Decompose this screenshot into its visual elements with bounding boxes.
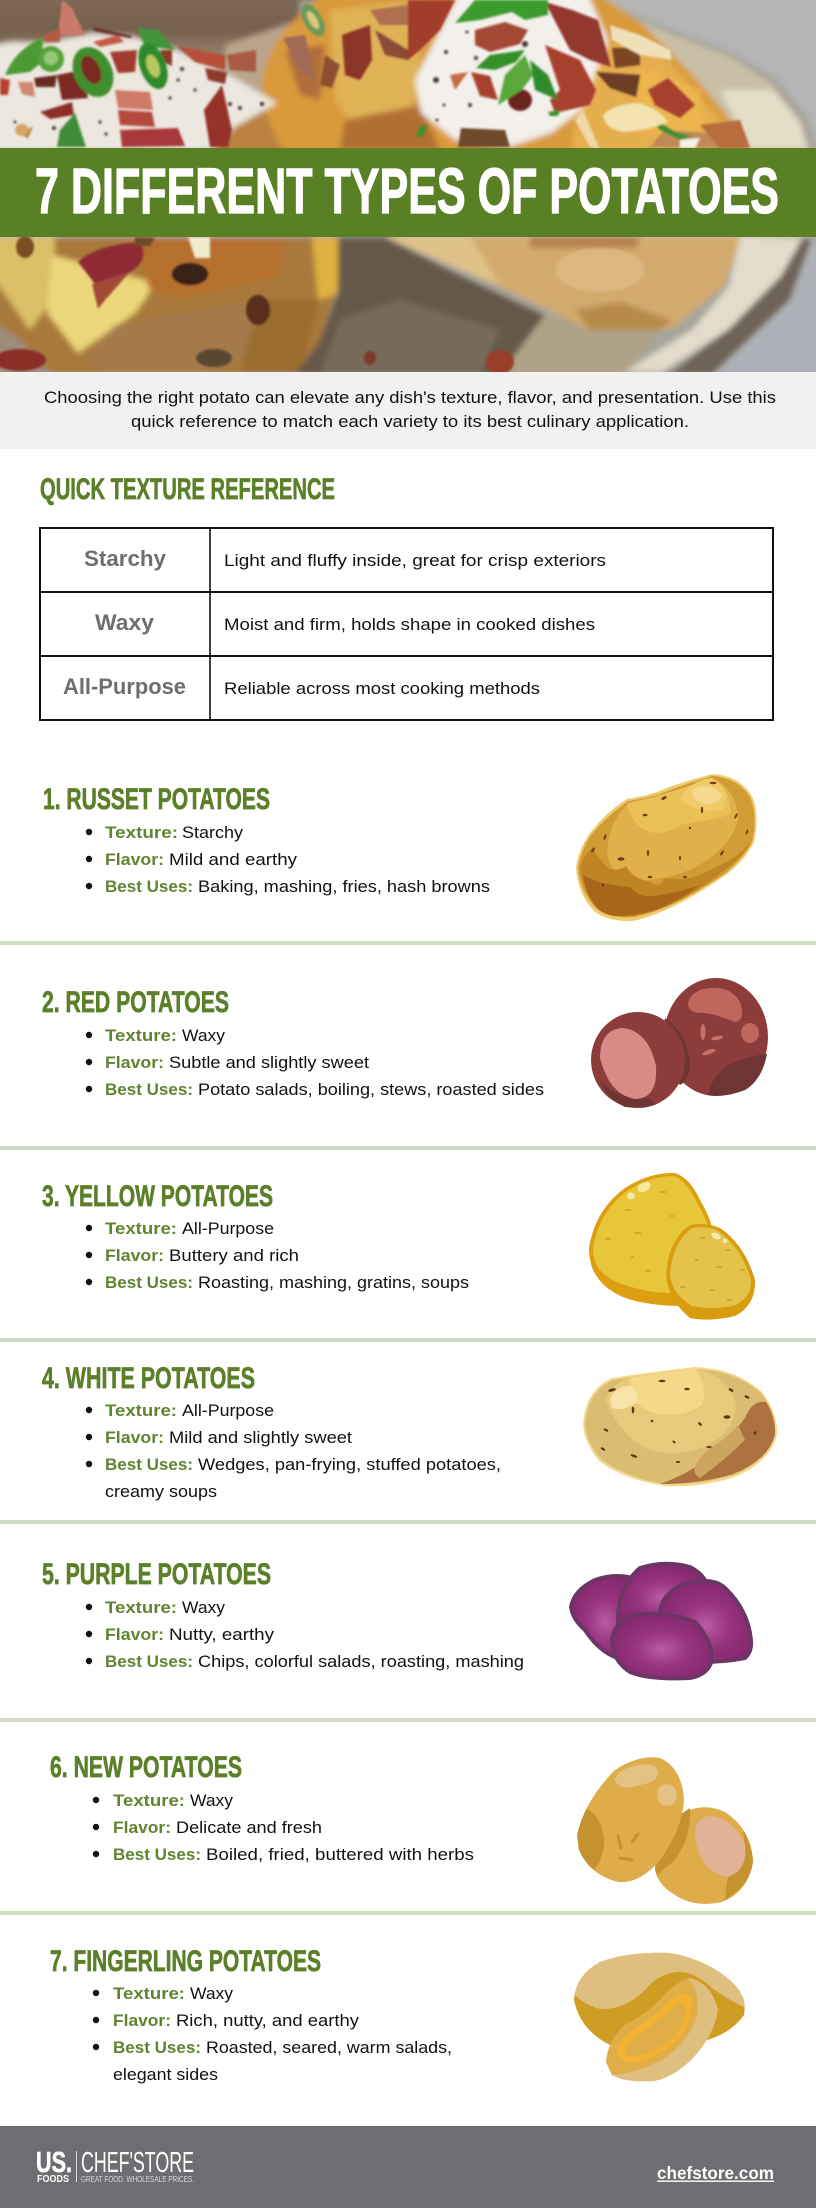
section 4: white potatoes: Flavor: [105, 1428, 164, 1447]
section 1: russet potatoes: 1. RUSSET POTATOES [43, 783, 270, 816]
texture reference table: Starchy [84, 546, 167, 571]
section 6: new potatoes: Boiled, fried, buttered with herbs [206, 1845, 474, 1864]
section 7: fingerling potatoes: Rich, nutty, and earthy [176, 2011, 360, 2030]
section 5: purple potatoes: Best Uses: [105, 1652, 193, 1671]
section 4: white potatoes: Wedges, pan-frying, stuffed potatoes, [198, 1455, 501, 1474]
section 3: yellow potatoes: Buttery and rich [169, 1246, 299, 1265]
section 1: russet potatoes: Texture: [105, 823, 178, 842]
section 5: purple potatoes: Chips, colorful salads, roasting, mashing [198, 1652, 524, 1671]
section 2: red potatoes: Flavor: [105, 1053, 164, 1072]
section 7: fingerling potatoes: elegant sides [113, 2065, 218, 2084]
plate center [295, 237, 545, 375]
divider [0, 1718, 816, 1722]
icon: red potatoes [591, 978, 768, 1108]
browned potato patches [0, 236, 645, 374]
section 7: fingerling potatoes: 7. FINGERLING POTATOES [50, 1945, 321, 1978]
icon: white potato [583, 1367, 777, 1486]
section 2: red potatoes: 2. RED POTATOES [42, 986, 229, 1019]
logo: US Foods Chef'Store: FOODS [37, 2174, 69, 2185]
bottom left potato [0, 237, 338, 375]
texture reference table: Light and fluffy inside, great for crisp exteriors [224, 551, 606, 570]
section 1: russet potatoes: Mild and earthy [169, 850, 298, 869]
section 4: white potatoes: Mild and slightly sweet [169, 1428, 352, 1447]
section 5: purple potatoes [42, 1558, 524, 1671]
logo: US Foods Chef'Store: US. [36, 2147, 72, 2179]
green onion left [5, 0, 330, 147]
icon: new potatoes [577, 1757, 753, 1904]
texture reference table: Moist and firm, holds shape in cooked dishes [224, 615, 595, 634]
bacon top left [0, 0, 256, 147]
bacon right potato [283, 0, 750, 148]
intro text block: Choosing the right potato can elevate any dish's texture, flavor, and presentation. Use this [44, 388, 776, 407]
texture reference table: Waxy [95, 610, 155, 635]
section 3: yellow potatoes: Flavor: [105, 1246, 164, 1265]
texture reference table: All-Purpose [63, 674, 186, 699]
section 6: new potatoes: Delicate and fresh [176, 1818, 322, 1837]
section 2: red potatoes: Subtle and slightly sweet [169, 1053, 369, 1072]
heading: quick texture reference: QUICK TEXTURE REFERENCE [40, 473, 335, 506]
section 2: red potatoes [42, 986, 544, 1099]
section 3: yellow potatoes: 3. YELLOW POTATOES [42, 1180, 273, 1213]
section 4: white potatoes: Texture: [105, 1401, 177, 1420]
section 6: new potatoes: Best Uses: [113, 1845, 201, 1864]
section 7: fingerling potatoes: Texture: [113, 1984, 185, 2003]
section 5: purple potatoes: 5. PURPLE POTATOES [42, 1558, 271, 1591]
section 5: purple potatoes: Texture: [105, 1598, 177, 1617]
icon: russet potato [576, 774, 757, 921]
section 7: fingerling potatoes: Waxy [190, 1984, 234, 2003]
section 4: white potatoes: All-Purpose [182, 1401, 274, 1420]
green onion right [416, 0, 692, 140]
section 5: purple potatoes: Flavor: [105, 1625, 164, 1644]
melted cheese [603, 103, 668, 132]
section 2: red potatoes: Texture: [105, 1026, 177, 1045]
divider [0, 1911, 816, 1915]
divider [0, 1338, 816, 1342]
section 5: purple potatoes: Waxy [182, 1598, 226, 1617]
section 1: russet potatoes: Flavor: [105, 850, 164, 869]
right potato [262, 0, 755, 160]
section 7: fingerling potatoes: Best Uses: [113, 2038, 201, 2057]
section 6: new potatoes: Waxy [190, 1791, 234, 1810]
footer bar [0, 2126, 816, 2208]
icon: purple potatoes [571, 1564, 751, 1678]
texture reference table [40, 528, 773, 720]
divider [0, 1520, 816, 1524]
footer link: chefstore.com [657, 2163, 774, 2183]
right bottom potato [470, 237, 740, 332]
plate rim bottom [625, 236, 802, 372]
cream left [0, 33, 277, 150]
intro text block [0, 372, 816, 449]
section 1: russet potatoes: Baking, mashing, fries, hash browns [198, 877, 490, 896]
section 5: purple potatoes: Nutty, earthy [169, 1625, 275, 1644]
section 6: new potatoes: 6. NEW POTATOES [50, 1751, 242, 1784]
section 4: white potatoes [42, 1362, 501, 1501]
section 4: white potatoes: 4. WHITE POTATOES [42, 1362, 255, 1395]
potato left top [206, 109, 288, 148]
section 3: yellow potatoes: Roasting, mashing, gratins, soups [198, 1273, 469, 1292]
section 7: fingerling potatoes: Flavor: [113, 2011, 171, 2030]
section 6: new potatoes: Flavor: [113, 1818, 171, 1837]
section 6: new potatoes: Texture: [113, 1791, 185, 1810]
section 1: russet potatoes [43, 783, 490, 896]
section 3: yellow potatoes: Texture: [105, 1219, 177, 1238]
hero photo: loaded baked potatoes [0, 0, 816, 380]
section 7: fingerling potatoes: Roasted, seared, warm salads, [206, 2038, 452, 2057]
section 2: red potatoes: Waxy [182, 1026, 226, 1045]
cream right [415, 0, 608, 147]
section 7: fingerling potatoes [50, 1945, 452, 2084]
section 4: white potatoes: Best Uses: [105, 1455, 193, 1474]
intro text block: quick reference to match each variety to its best culinary application. [131, 412, 689, 431]
section 1: russet potatoes: Starchy [182, 823, 244, 842]
pepper specks [14, 30, 528, 136]
divider [0, 1146, 816, 1150]
section 3: yellow potatoes [42, 1180, 469, 1292]
icon: yellow potatoes [589, 1173, 755, 1320]
logo: US Foods Chef'Store: GREAT FOOD. WHOLESALE PRICES. [81, 2174, 194, 2184]
icon: fingerling potato [574, 1953, 745, 2081]
logo: US Foods Chef'Store [36, 2147, 194, 2185]
divider [0, 941, 816, 945]
section 2: red potatoes: Potato salads, boiling, stews, roasted sides [198, 1080, 544, 1099]
section 2: red potatoes: Best Uses: [105, 1080, 193, 1099]
section 3: yellow potatoes: All-Purpose [182, 1219, 274, 1238]
logo: US Foods Chef'Store: CHEF'STORE [81, 2147, 194, 2179]
texture reference table: Reliable across most cooking methods [224, 679, 540, 698]
section 6: new potatoes [50, 1751, 474, 1864]
section 4: white potatoes: creamy soups [105, 1482, 217, 1501]
section 3: yellow potatoes: Best Uses: [105, 1273, 193, 1292]
section 1: russet potatoes: Best Uses: [105, 877, 193, 896]
